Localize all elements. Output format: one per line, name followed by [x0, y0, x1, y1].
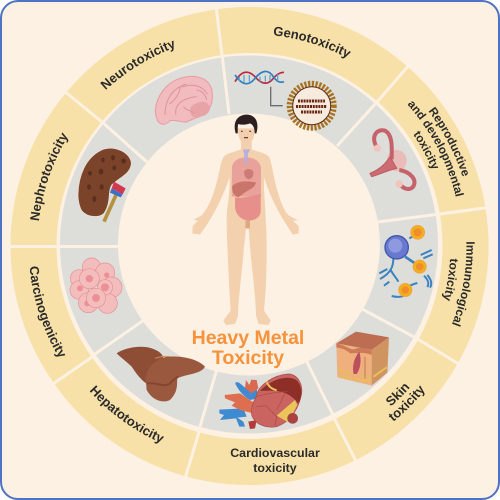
lungs — [232, 157, 261, 197]
segment: neurotoxicity — [84, 32, 219, 107]
icon: DNA helix — [235, 71, 284, 84]
label: cardiovascular toxicity: Cardiovascular — [230, 446, 320, 460]
segment: hepatotoxicity — [73, 370, 191, 454]
segment: carcinogenicity — [34, 246, 73, 370]
segment: immunological toxicity — [438, 212, 466, 352]
label: nephrotoxicity: Nephrotoxicity — [30, 132, 68, 220]
label: cardiovascular toxicity: toxicity — [253, 461, 297, 475]
segment: cardiovascular toxicity — [191, 440, 346, 462]
label: reproductive and developmental toxicity: toxicity — [414, 130, 438, 168]
face — [238, 128, 255, 143]
title: Heavy Metal Toxicity: Heavy Metal — [192, 327, 304, 349]
icon: immune cell, antibodies and antigens — [379, 225, 433, 297]
pelvis — [245, 221, 250, 228]
liver — [232, 181, 256, 197]
sector: genotoxicity — [227, 85, 356, 126]
sector: carcinogenic — [89, 246, 118, 337]
label: immunological toxicity: toxicity — [442, 258, 458, 302]
sector: skin — [320, 323, 388, 388]
icon: uterus and ovaries — [370, 130, 414, 189]
trachea — [243, 149, 250, 163]
icon: brain — [155, 76, 212, 124]
body silhouette — [192, 142, 299, 325]
icon: connector bracket — [271, 87, 283, 106]
label: genotoxicity: Genotoxicity — [274, 26, 351, 58]
sector: reproductive — [356, 126, 407, 220]
label: reproductive and developmental toxicity: Reproductive — [428, 106, 468, 176]
segment: skin toxicity — [346, 352, 438, 440]
hair — [235, 115, 257, 133]
segment: genotoxicity — [219, 30, 392, 84]
title: Heavy Metal Toxicity — [192, 327, 304, 369]
label: cardiovascular toxicity — [230, 446, 320, 475]
inner ring: organ illustrations background — [89, 85, 409, 404]
icon: kidney — [78, 148, 131, 222]
label: carcinogenicity: Carcinogenicity — [30, 266, 66, 357]
icon: heart with vessels — [219, 374, 302, 429]
segment: reproductive and developmental toxicity — [392, 84, 463, 212]
icon: liver — [117, 347, 205, 401]
sector: hepatic — [118, 337, 207, 399]
label: immunological toxicity: Immunological — [452, 242, 475, 327]
intestines — [235, 194, 261, 221]
icon: virus particle with nucleic material — [290, 84, 334, 128]
label: neurotoxicity: Neurotoxicity — [100, 40, 174, 90]
title: Heavy Metal Toxicity: Toxicity — [212, 347, 284, 369]
icon: cancer cell cluster — [70, 258, 122, 313]
label: skin toxicity: Skin — [386, 384, 410, 406]
sector: brain — [126, 86, 227, 142]
outer ring: toxicity labels — [34, 30, 466, 462]
sector: cardiovascular — [207, 388, 320, 404]
segment: nephrotoxicity — [34, 107, 84, 246]
sector: renal — [89, 142, 126, 246]
heart — [244, 169, 253, 179]
icon: skin cross-section — [336, 332, 389, 386]
human body figure — [192, 115, 299, 325]
facial features — [241, 131, 251, 138]
sector: immunological — [388, 220, 409, 323]
label: skin toxicity: toxicity — [388, 385, 425, 421]
label: hepatotoxicity: Hepatotoxicity — [90, 385, 164, 444]
label: reproductive and developmental toxicity: and developmental — [408, 102, 464, 196]
